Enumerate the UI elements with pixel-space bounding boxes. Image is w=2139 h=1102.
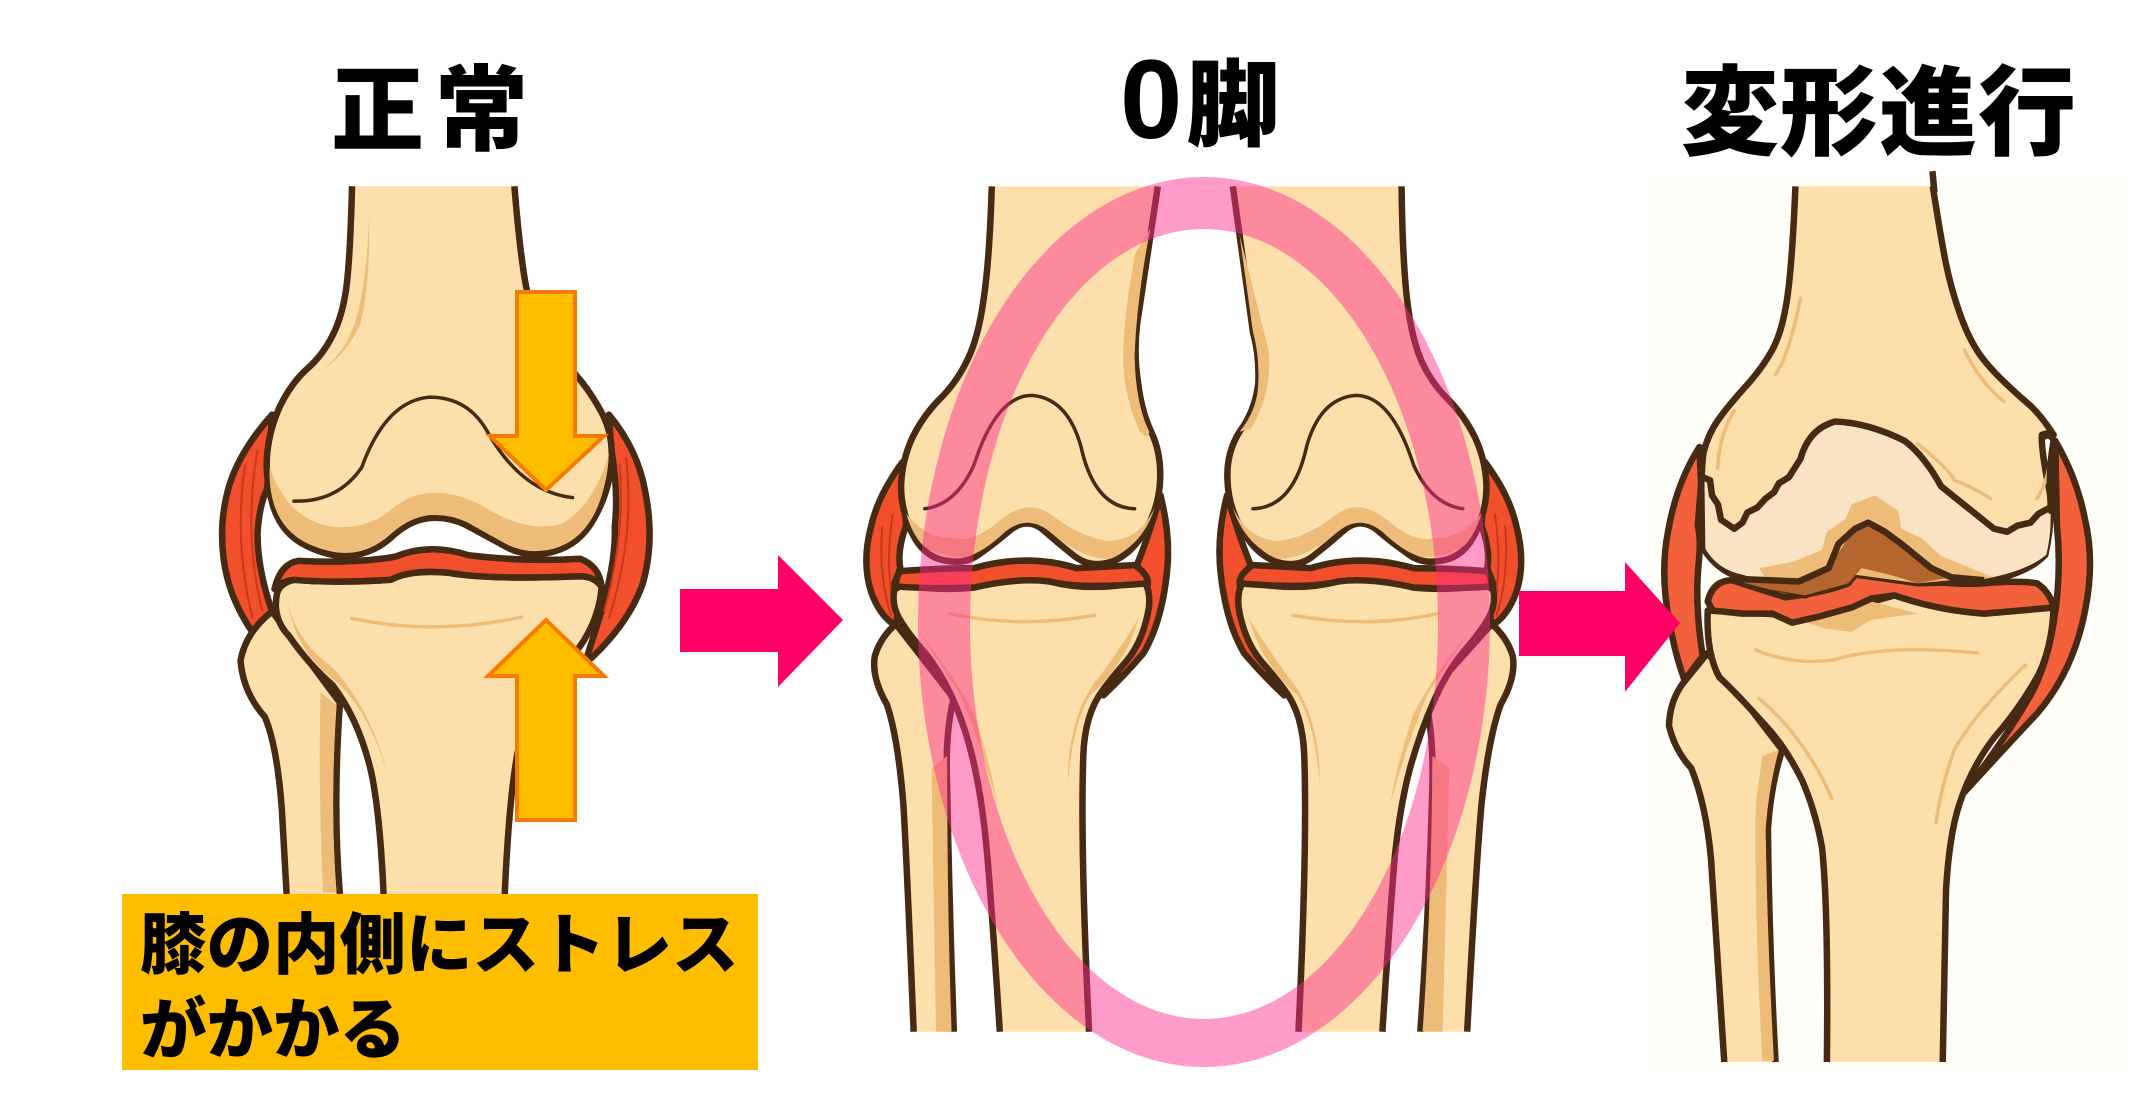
title: O-legs: 0脚 <box>1120 37 1280 162</box>
callout: stress on inner knee: 膝の内側にストレス <box>140 909 738 983</box>
arrow: normal to O-legs <box>680 555 843 687</box>
icon: downward load arrow <box>490 292 604 490</box>
title: normal: 正常 <box>331 59 539 163</box>
left knee <box>866 186 1168 1032</box>
right knee <box>1219 186 1521 1032</box>
arrow: O-legs to deformity <box>1519 562 1680 692</box>
icon: upward load arrow <box>488 620 604 820</box>
paper background of the illustration <box>1650 176 2120 1071</box>
callout: stress on inner knee: がかかる <box>140 993 406 1068</box>
callout: stress on inner knee <box>122 894 758 1070</box>
panel: normal knee illustration <box>222 186 650 894</box>
highlight ring: O-shaped leg line <box>918 177 1490 1067</box>
panel: O-legs knees illustration <box>866 186 1521 1032</box>
panel: advanced deformity knee illustration <box>1650 171 2120 1071</box>
title: deformity progression: 変形進行 <box>1681 58 2077 168</box>
